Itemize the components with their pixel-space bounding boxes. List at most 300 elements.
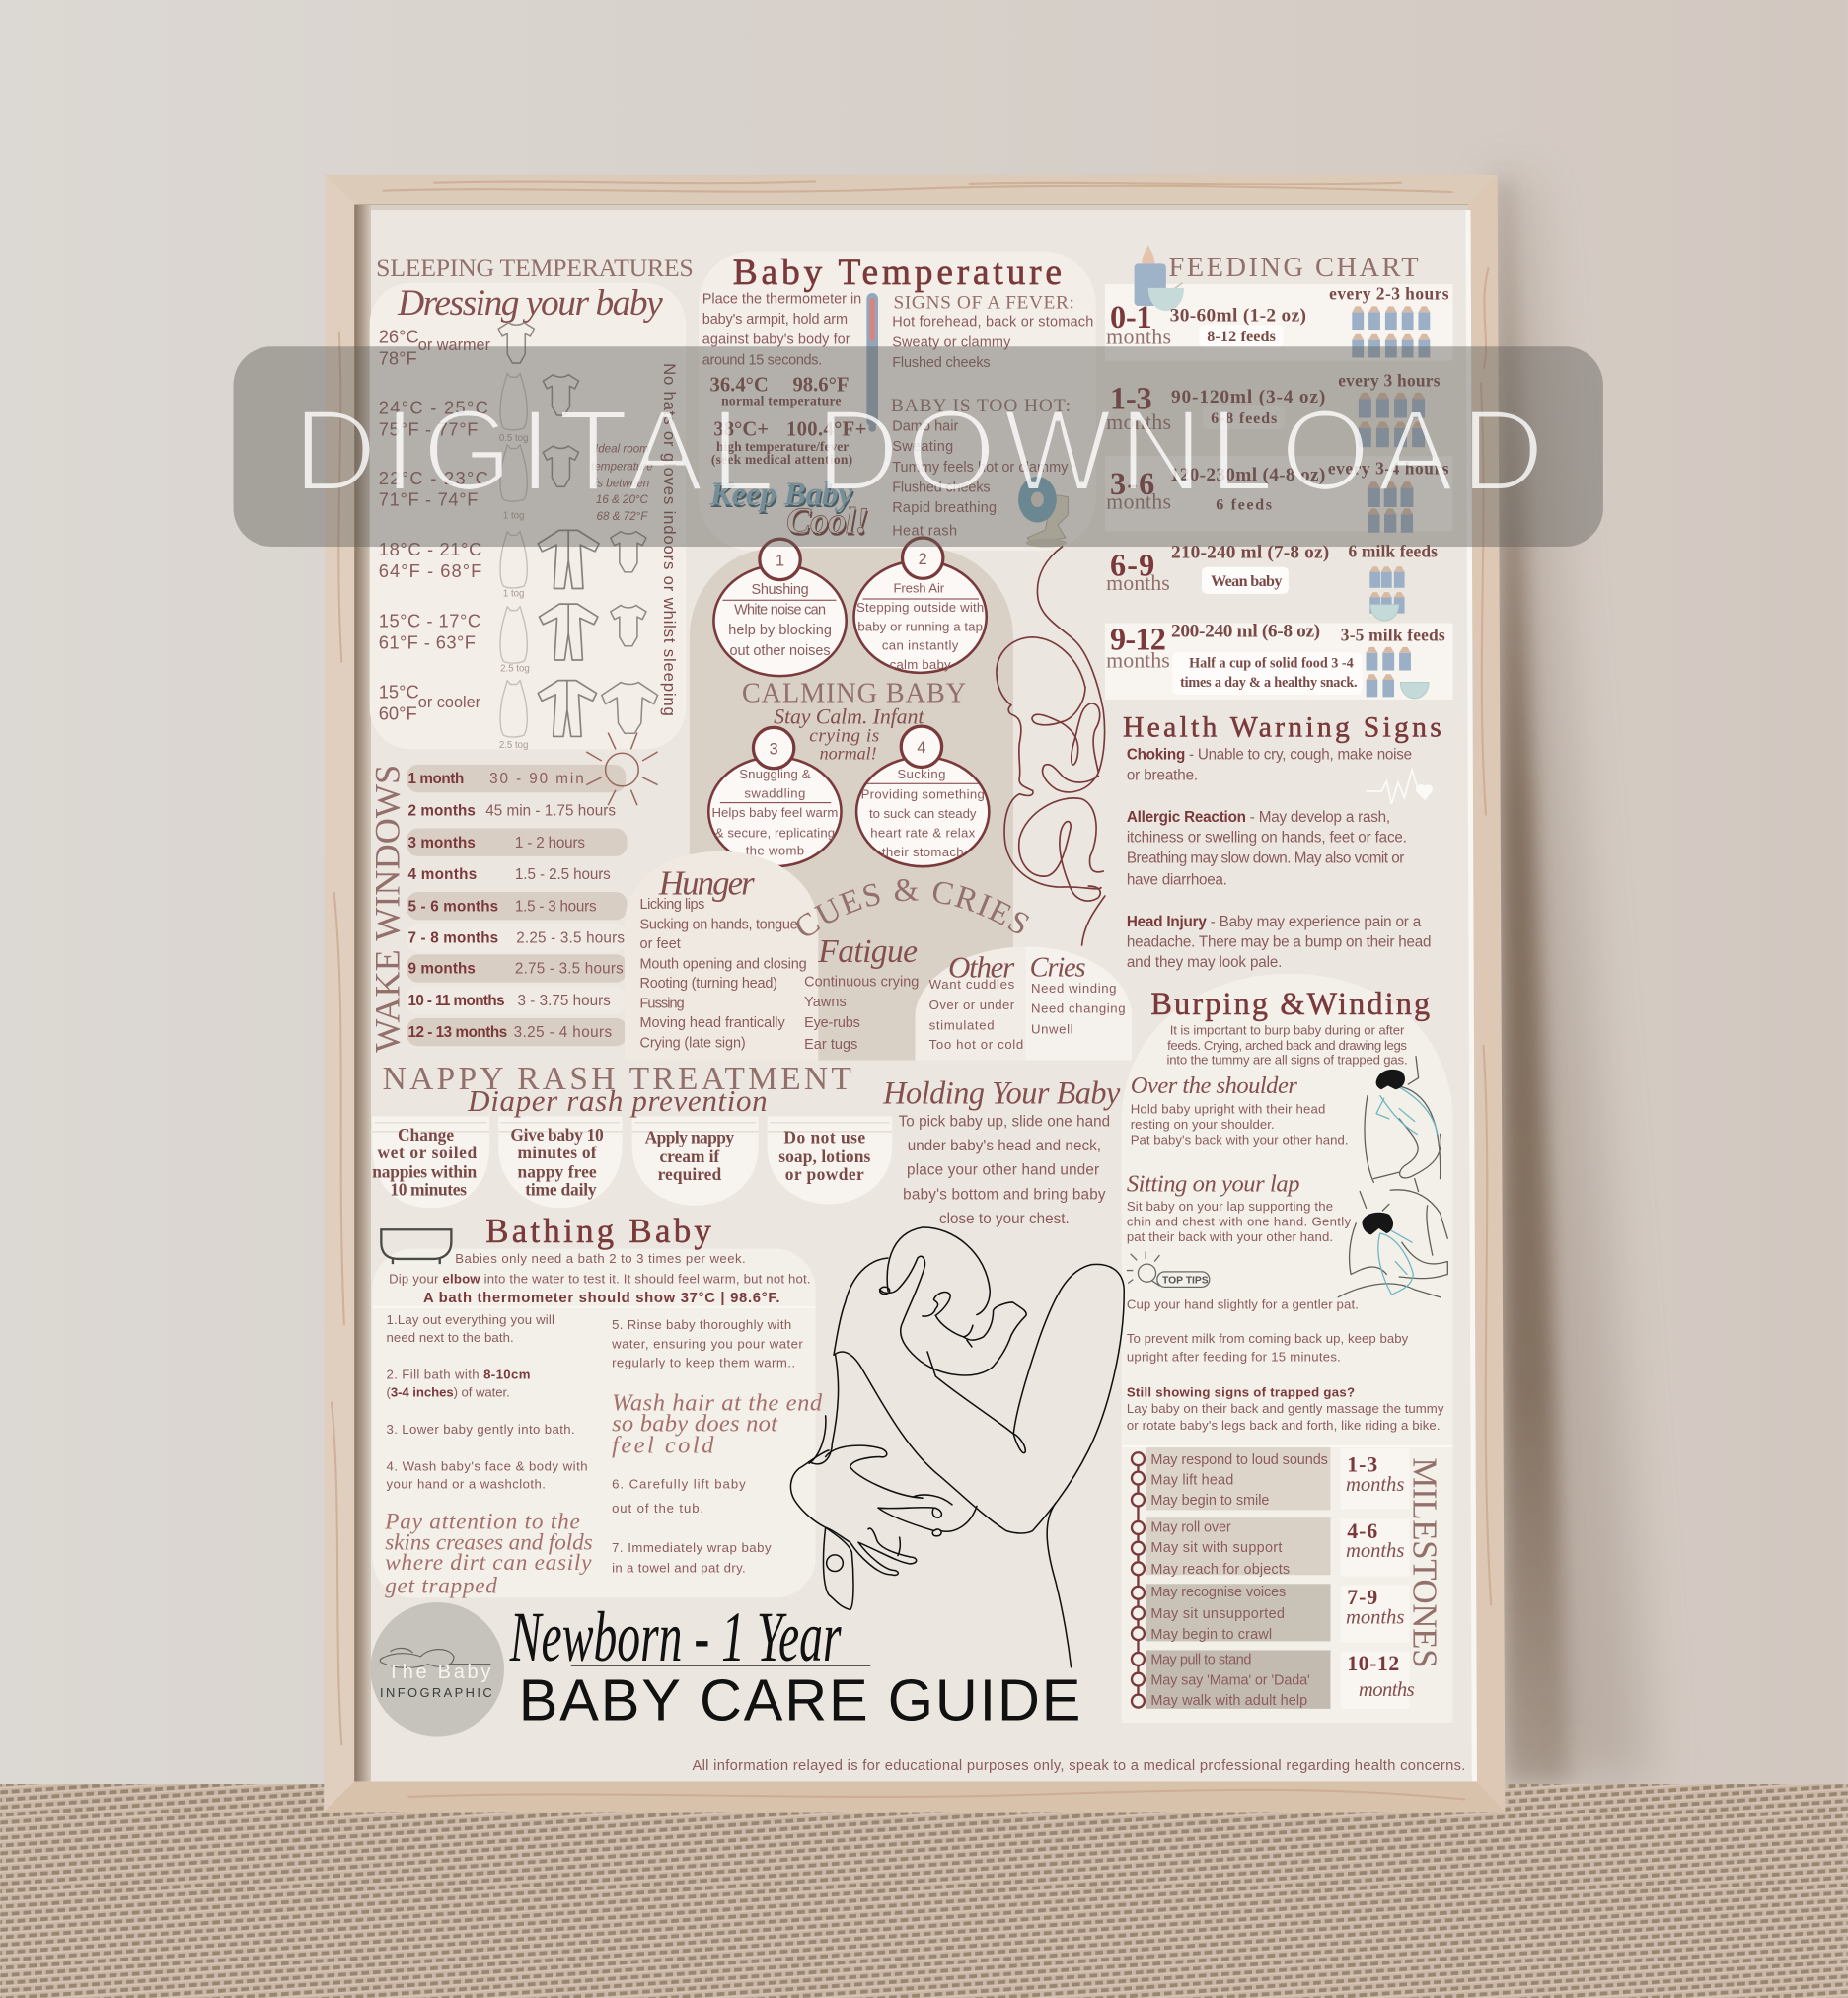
text: thermometer instructions: Place the thermometer in	[702, 291, 861, 307]
line art: mother holding baby	[790, 1227, 1124, 1667]
panel background: arch	[690, 548, 1013, 1060]
temperature labels: 60°F	[379, 703, 417, 724]
text: tips: Still showing signs of trapped gas?	[1127, 1384, 1355, 1399]
wake window rows: 9 months	[407, 961, 476, 978]
script note: wash hair: so baby does not	[612, 1410, 778, 1437]
steps: right column: in a towel and pat dry.	[612, 1561, 746, 1576]
milestone text: May recognise voices	[1150, 1585, 1286, 1600]
wake window rows: 5 - 6 months	[407, 898, 498, 915]
text: allergic reaction	[1127, 809, 1407, 888]
callout: keep baby cool	[709, 476, 870, 544]
row: 0-1 months: every 2-3 hours	[1329, 283, 1449, 303]
row: 0-1 months: 8-12 feeds	[1207, 329, 1276, 345]
icon: top tips bulb	[1127, 1251, 1210, 1287]
wake window rows: 2.75 - 3.5 hours	[515, 961, 624, 978]
row bars	[407, 765, 628, 1046]
circle 4: sucking: their stomach	[882, 845, 964, 859]
circle 1: shushing: help by blocking	[728, 623, 832, 638]
text block: holding your baby: close to your chest.	[939, 1211, 1070, 1227]
row: 9-12 months: 9-12	[1110, 622, 1166, 657]
heading: burping and winding: Burping &Winding	[1150, 986, 1430, 1021]
temperature readings: 36.4°C	[710, 374, 769, 396]
temperature labels: 26°C	[379, 326, 419, 346]
text: over the shoulder: Pat baby's back with your other hand.	[1131, 1133, 1349, 1147]
row: 3-6 months: months	[1106, 488, 1171, 513]
column: hunger: Moving head frantically	[640, 1015, 785, 1031]
icon: bath tub	[381, 1229, 451, 1264]
note: ideal room temperature: Ideal room	[595, 442, 649, 455]
arch: hunger background	[625, 851, 818, 1060]
column: hunger: Crying (late sign)	[640, 1036, 746, 1052]
row: 6-9 months: months	[1106, 570, 1170, 595]
text: tips: or rotate baby's legs back and forth, like riding a bike.	[1127, 1418, 1441, 1433]
panel background	[699, 251, 1096, 551]
steps: right column	[611, 1317, 803, 1576]
circle 2: fresh air: 2	[919, 551, 927, 568]
curve guide for cues heading	[804, 901, 1032, 944]
circle 1: shushing: 1	[776, 552, 784, 569]
panel: milestones	[1122, 1446, 1452, 1709]
row backgrounds	[1105, 284, 1452, 700]
steps: right column: out of the tub.	[612, 1501, 703, 1516]
list: baby is too hot: Rapid breathing	[892, 500, 997, 516]
temperature labels: 24°C - 25°C	[379, 398, 488, 418]
row: 3-6 months: every 3-4 hours	[1328, 458, 1449, 478]
script note: pay attention: get trapped	[385, 1573, 497, 1598]
nappy tips: soap, lotions	[778, 1147, 870, 1166]
panel: health warning signs	[1123, 711, 1441, 971]
column: cries: Need winding	[1031, 981, 1117, 996]
steps: left column: (3-4 inches) of water.	[387, 1384, 510, 1399]
row: 6-9 months: 6 milk feeds	[1349, 541, 1438, 560]
temperature readings: 100.4°F+	[786, 419, 866, 441]
circle 2: fresh air: calm baby	[890, 657, 951, 672]
wake window rows: 45 min - 1.75 hours	[485, 803, 616, 820]
wake window rows: 3.25 - 4 hours	[514, 1024, 612, 1041]
circle 3: snuggling: Snuggling &	[739, 767, 811, 781]
text: choking	[1127, 747, 1412, 783]
text: bath intro: Babies only need a bath 2 to 3 times per week.	[455, 1251, 746, 1266]
steps: left column: your hand or a washcloth.	[387, 1476, 546, 1491]
text: head injury	[1127, 914, 1431, 971]
steps: right column: 5. Rinse baby thoroughly with	[612, 1317, 791, 1332]
heading: calming baby: CALMING BABY	[742, 679, 966, 709]
wake window rows: 1 - 2 hours	[515, 835, 585, 851]
circle 4: sucking: 4	[917, 739, 925, 757]
text: sitting on your lap: Sitting on your lap	[1127, 1171, 1299, 1198]
age boxes	[1341, 1448, 1410, 1709]
list: signs of a fever: SIGNS OF A FEVER:	[894, 293, 1074, 314]
steps: left column: 2. Fill bath with 8-10cm	[387, 1367, 530, 1381]
illustration: baby on lap	[1338, 1190, 1447, 1297]
temperature readings: 38°C+	[713, 419, 769, 441]
nappy tips: time daily	[525, 1179, 597, 1199]
text: thermometer instructions: against baby's body for	[702, 333, 850, 348]
row: 9-12 months	[1106, 622, 1445, 699]
milestone text: May pull to stand	[1150, 1653, 1251, 1668]
circle 4: sucking: to suck can steady	[869, 806, 977, 821]
milestone text: May walk with adult help	[1150, 1693, 1307, 1709]
milestone text: May say 'Mama' or 'Dada'	[1150, 1672, 1310, 1688]
text: allergic reaction: Allergic Reaction - May develop a rash,	[1127, 809, 1390, 826]
clothing icons by temperature: 0.5 tog	[499, 433, 528, 444]
text: choking: Choking - Unable to cry, cough, make noise	[1127, 747, 1412, 764]
column: fatigue: Ear tugs	[804, 1037, 857, 1053]
row: 1-3 months: 6-8 feeds	[1211, 410, 1277, 427]
row: 0-1 months: months	[1106, 325, 1171, 349]
callout: keep baby cool: Cool!	[787, 503, 870, 544]
list: baby is too hot: Flushed cheeks	[892, 481, 991, 496]
temperature labels: 22°C - 23°C	[379, 468, 488, 488]
milestone bars	[1146, 1447, 1330, 1709]
clothing icons by temperature	[498, 323, 658, 751]
column: cries: Need changing	[1031, 1001, 1126, 1016]
column: other	[929, 950, 1023, 1052]
row: 6-9 months	[1106, 541, 1438, 621]
milestone text: May reach for objects	[1150, 1562, 1290, 1578]
nappy tips: cream if	[660, 1147, 719, 1166]
frame shadow on wall	[1496, 179, 1651, 1784]
wake window rows: 2 months	[407, 803, 476, 820]
icon: bottle and bowl	[1135, 245, 1184, 311]
steps: left column: need next to the bath.	[387, 1330, 514, 1345]
callout: keep baby cool: Cool!	[786, 501, 869, 542]
script: diaper rash prevention: Diaper rash prevention	[467, 1083, 768, 1118]
heading: bathing baby: Bathing Baby	[485, 1212, 711, 1250]
steps: right column: 6. Carefully lift baby	[612, 1476, 746, 1491]
circle 2: fresh air: Stepping outside with	[856, 600, 984, 615]
arch: other and cries background	[915, 947, 1132, 1060]
column: hunger: Licking lips	[640, 897, 704, 913]
line art: fetus	[997, 547, 1105, 945]
icon: pulse and heart	[1367, 770, 1432, 804]
row: 1-3 months: months	[1106, 409, 1171, 434]
heading: feeding chart: FEEDING CHART	[1168, 253, 1419, 283]
script: stay calm: crying is	[809, 726, 879, 747]
circle 1: shushing: Shushing	[752, 582, 809, 598]
note: ideal room temperature: 16 & 20°C	[596, 493, 649, 506]
wake window rows: 7 - 8 months	[407, 930, 498, 947]
age labels: months	[1346, 1474, 1404, 1496]
row: 1-3 months: 1-3	[1110, 381, 1152, 416]
column: cries	[1030, 952, 1126, 1036]
temperature labels: 15°C - 17°C	[379, 610, 480, 630]
text: over the shoulder	[1131, 1073, 1349, 1147]
text: tips: Cup your hand slightly for a gentler pat.	[1127, 1296, 1359, 1311]
text block: holding your baby	[882, 1074, 1121, 1227]
nappy tips: Apply nappy	[645, 1127, 734, 1147]
text: bath intro: A bath thermometer should show 37°C | 98.6°F.	[423, 1291, 780, 1306]
text block: holding your baby: baby's bottom and bring baby	[903, 1186, 1106, 1203]
row: 6-9 months: Wean baby	[1211, 573, 1282, 590]
age labels: months	[1346, 1540, 1404, 1562]
list: baby is too hot: Damp hair	[892, 419, 959, 435]
column: fatigue	[804, 933, 919, 1053]
temperature labels: 78°F	[379, 347, 417, 368]
column: hunger: Sucking on hands, tongue	[640, 917, 798, 932]
temperature readings: (seek medical attention)	[711, 452, 852, 468]
text block: holding your baby: To pick baby up, slide one hand	[899, 1114, 1110, 1131]
column: fatigue: Yawns	[804, 995, 847, 1010]
panel: bathing baby	[372, 1212, 823, 1598]
nappy tips: nappy free	[518, 1161, 597, 1181]
age labels: months	[1359, 1679, 1415, 1701]
divider	[1122, 1445, 1452, 1447]
row: 9-12 months: Half a cup of solid food 3 -4	[1189, 656, 1354, 672]
circle 3: snuggling: the womb	[746, 844, 804, 858]
steps: left column	[387, 1312, 588, 1491]
milestone text: May respond to loud sounds	[1150, 1452, 1328, 1468]
column: fatigue: Fatigue	[817, 933, 918, 970]
column: other: Other	[948, 950, 1015, 985]
text: thermometer instructions: baby's armpit, hold arm	[702, 312, 848, 328]
nappy icons	[372, 1116, 892, 1208]
text: intro: into the tummy are all signs of trapped gas.	[1167, 1052, 1408, 1067]
wake window rows: 1.5 - 3 hours	[515, 898, 597, 915]
nappy tips: or powder	[785, 1164, 864, 1184]
panel background: arch	[1122, 974, 1452, 1723]
text: allergic reaction: itchiness or swelling on hands, feet or face.	[1127, 830, 1407, 847]
milestone text: May lift head	[1150, 1473, 1233, 1489]
callout: keep baby cool: Keep Baby	[710, 479, 854, 515]
nappy tips: 10 minutes	[390, 1179, 467, 1199]
row: 9-12 months: 3-5 milk feeds	[1341, 626, 1445, 645]
wake window rows: 1 month	[407, 771, 464, 787]
temperature labels: 61°F - 63°F	[379, 631, 476, 652]
heading: sleeping temperatures: SLEEPING TEMPERATURES	[376, 254, 694, 282]
panel background	[370, 283, 686, 749]
text: over the shoulder: Hold baby upright with their head	[1131, 1102, 1325, 1117]
vertical heading: milestones: MILESTONES	[1405, 1457, 1443, 1668]
script note: pay attention: Pay attention to the	[384, 1510, 580, 1535]
temperature labels: 15°C	[379, 682, 419, 703]
row: 3-6 months: 6 feeds	[1216, 497, 1272, 514]
circle 2: fresh air	[853, 538, 987, 673]
list: baby is too hot: Tummy feels hot or clammy	[892, 460, 1069, 476]
milestone text: May roll over	[1150, 1519, 1231, 1535]
nappy tips: Give baby 10	[510, 1125, 604, 1145]
circle 1: shushing: White noise can	[734, 602, 826, 618]
list: baby is too hot: Heat rash	[892, 523, 957, 539]
temperature labels: 75°F - 77°F	[379, 419, 478, 440]
steps: left column: 4. Wash baby's face & body with	[387, 1458, 588, 1473]
row: 1-3 months: every 3 hours	[1338, 370, 1441, 390]
circle 4: sucking: Providing something	[861, 787, 985, 802]
wake window rows: 10 - 11 months	[407, 993, 505, 1009]
panel: wake windows	[367, 733, 658, 1053]
age labels: 10-12	[1347, 1651, 1399, 1675]
text: head injury: and they may look pale.	[1127, 954, 1282, 971]
list: baby is too hot: Sweating	[892, 439, 953, 455]
title: newborn - 1 year: Newborn - 1 Year	[509, 1597, 842, 1676]
text: intro	[1167, 1023, 1408, 1067]
temperature readings	[710, 374, 866, 468]
column: other: Too hot or cold	[929, 1037, 1023, 1052]
steps: left column: 3. Lower baby gently into bath.	[387, 1422, 575, 1437]
text: bath intro	[372, 1251, 816, 1307]
logo: the baby infographic: The Baby	[388, 1662, 490, 1683]
circle 3: snuggling: 3	[770, 741, 778, 759]
column: other: Want cuddles	[929, 977, 1015, 992]
temperature readings: normal temperature	[721, 394, 842, 408]
vertical note: no hats or gloves: No hats or gloves indoors or whilst sleeping	[660, 363, 679, 716]
list: baby is too hot	[891, 396, 1071, 539]
clothing icons by temperature: 1 tog	[503, 588, 524, 599]
milestone text: May sit with support	[1150, 1540, 1282, 1556]
heading: nappy rash treatment: NAPPY RASH TREATMENT	[383, 1061, 851, 1097]
divider shading: cries column	[1026, 947, 1132, 1060]
milestone text: May begin to crawl	[1150, 1627, 1272, 1643]
illustration: baby over shoulder	[1365, 1057, 1441, 1192]
age labels: 4-6	[1347, 1518, 1377, 1543]
wake window rows: 3 months	[407, 835, 476, 851]
milestone text	[1150, 1452, 1328, 1709]
steps: right column: water, ensuring you pour water	[611, 1336, 803, 1351]
nappy tips: minutes of	[518, 1143, 597, 1162]
panel: sleeping temperatures	[370, 254, 694, 751]
text: intro: feeds. Crying, arched back and drawing legs	[1167, 1038, 1407, 1053]
icon: fan	[1018, 477, 1068, 548]
icon: top tips bulb: TOP TIPS	[1162, 1275, 1209, 1286]
nappy tips: Do not use	[783, 1127, 865, 1147]
circle 1: shushing: out other noises	[730, 643, 831, 659]
text: tips: upright after feeding for 15 minutes.	[1127, 1349, 1341, 1364]
logo: the baby infographic: INFOGRAPHIC	[380, 1685, 492, 1700]
text: sitting on your lap: chin and chest with one hand. Gently	[1127, 1214, 1352, 1228]
title: baby care guide: BABY CARE GUIDE	[519, 1666, 1080, 1733]
steps: right column: 7. Immediately wrap baby	[612, 1540, 772, 1555]
row: 9-12 months: months	[1106, 648, 1170, 673]
script note: pay attention: where dirt can easily	[385, 1550, 592, 1576]
heading: baby temperature: Baby Temperature	[733, 253, 1062, 293]
list: signs of a fever: Hot forehead, back or stomach	[892, 315, 1093, 331]
circle 4: sucking: heart rate & relax	[870, 825, 976, 840]
text: head injury: Head Injury - Baby may experience pain or a	[1127, 914, 1422, 930]
panel: calming baby	[690, 538, 1013, 1060]
age labels: 1-3	[1347, 1452, 1377, 1477]
wooden picture frame	[324, 175, 1505, 1812]
note: ideal room temperature: is between	[595, 477, 649, 489]
note: ideal room temperature: 68 & 72°F	[597, 510, 648, 523]
text: allergic reaction: have diarrhoea.	[1127, 871, 1227, 888]
circle 3: snuggling: & secure, replicating	[715, 825, 835, 840]
panel: feeding chart	[1105, 245, 1452, 700]
column: hunger: Rooting (turning head)	[640, 976, 777, 992]
wake window rows: 30 - 90 min	[489, 771, 584, 787]
script note: wash hair	[612, 1390, 823, 1458]
column: hunger	[640, 864, 807, 1052]
text: thermometer instructions: around 15 seconds.	[702, 352, 822, 368]
column: hunger: Fussing	[640, 997, 685, 1012]
text: sitting on your lap	[1127, 1171, 1352, 1244]
text: sitting on your lap: pat their back with your other hand.	[1127, 1229, 1333, 1244]
column: cries: Cries	[1030, 952, 1086, 983]
milestone text: May begin to smile	[1150, 1493, 1269, 1509]
circle 2: fresh air: Fresh Air	[894, 581, 945, 596]
row: 6-9 months: 6-9	[1110, 548, 1154, 583]
wake window rows: 3 - 3.75 hours	[518, 993, 611, 1009]
nappy tips	[372, 1125, 870, 1199]
list: signs of a fever	[892, 293, 1093, 371]
circle 2: fresh air: can instantly	[882, 638, 959, 653]
nappy tips: Change	[398, 1125, 454, 1145]
column: hunger: or feet	[640, 936, 681, 952]
nappy tips: required	[658, 1164, 721, 1184]
note: ideal room temperature	[591, 442, 653, 523]
script note: pay attention	[384, 1510, 593, 1598]
callout: keep baby cool: Keep Baby	[709, 476, 852, 512]
text: sitting on your lap: Sit baby on your lap supporting the	[1127, 1199, 1333, 1214]
timeline	[1132, 1452, 1145, 1708]
row: 3-6 months	[1106, 458, 1449, 533]
circle 3: snuggling	[708, 727, 842, 866]
footer disclaimer: All information relayed is for educational purposes only, speak to a medical professional regarding health concerns.	[692, 1758, 1465, 1774]
temperature labels: or cooler	[418, 694, 481, 711]
age labels	[1346, 1452, 1415, 1701]
column: cries: Unwell	[1031, 1021, 1073, 1036]
watermark banner: digital download: DIGITAL DOWNLOAD	[293, 386, 1544, 515]
watermark banner: digital download	[234, 346, 1603, 547]
temperature labels: 18°C - 21°C	[379, 539, 481, 559]
wake window rows: 2.25 - 3.5 hours	[516, 930, 625, 947]
temperature labels: or warmer	[418, 336, 491, 354]
list: signs of a fever: Sweaty or clammy	[892, 334, 1011, 350]
row: 9-12 months: 200-240 ml (6-8 oz)	[1171, 622, 1320, 642]
column: fatigue: Continuous crying	[804, 975, 919, 991]
row: 1-3 months: 90-120ml (3-4 oz)	[1171, 387, 1325, 407]
text: over the shoulder: resting on your shoulder.	[1131, 1117, 1275, 1132]
script heading: dressing your baby: Dressing your baby	[397, 283, 663, 324]
script: stay calm: normal!	[820, 744, 877, 764]
text block: holding your baby: under baby's head and neck,	[908, 1138, 1101, 1154]
list: signs of a fever: Flushed cheeks	[892, 355, 991, 371]
column: hunger: Hunger	[658, 864, 755, 903]
steps: right column: regularly to keep them warm..	[612, 1356, 795, 1370]
text block: holding your baby: Holding Your Baby	[882, 1074, 1121, 1110]
icon: sun	[586, 733, 658, 805]
wake window rows: 4 months	[407, 866, 477, 883]
column: fatigue: Eye-rubs	[804, 1015, 860, 1031]
script note: wash hair: feel cold	[612, 1432, 714, 1458]
row: 0-1 months	[1106, 283, 1449, 357]
milestone text: May sit unsupported	[1150, 1606, 1285, 1622]
temperature labels	[379, 326, 491, 724]
nappy tips: nappies within	[372, 1161, 477, 1181]
row: 3-6 months: 3-6	[1110, 466, 1154, 501]
circle 4: sucking: Sucking	[897, 767, 945, 781]
age labels: months	[1346, 1606, 1404, 1628]
text: choking: or breathe.	[1127, 767, 1198, 783]
clothing icons by temperature: 1 tog	[503, 511, 524, 522]
circle 1: shushing	[713, 539, 847, 676]
row: 3-6 months: 120-230ml (4-8 oz)	[1170, 465, 1325, 485]
wake window rows: 12 - 13 months	[407, 1024, 507, 1041]
vertical heading: wake windows: WAKE WINDOWS	[367, 765, 407, 1053]
text: head injury: headache. There may be a bump on their head	[1127, 934, 1431, 951]
panel: baby temperature	[699, 251, 1096, 551]
circle 4: sucking	[856, 726, 989, 866]
clothing icons by temperature: 2.5 tog	[499, 740, 528, 751]
text: tips: To prevent milk from coming back up, keep baby	[1127, 1331, 1409, 1346]
list: baby is too hot: BABY IS TOO HOT:	[891, 396, 1071, 416]
steps: left column: 1.Lay out everything you will	[387, 1312, 554, 1327]
script note: pay attention: skins creases and folds	[385, 1529, 593, 1555]
panel background	[372, 1249, 816, 1597]
heading: health warning signs: Health Warning Signs	[1123, 711, 1441, 743]
text: thermometer instructions	[702, 291, 861, 368]
row: 9-12 months: times a day & a healthy snack.	[1180, 675, 1358, 691]
script: stay calm	[774, 704, 924, 764]
